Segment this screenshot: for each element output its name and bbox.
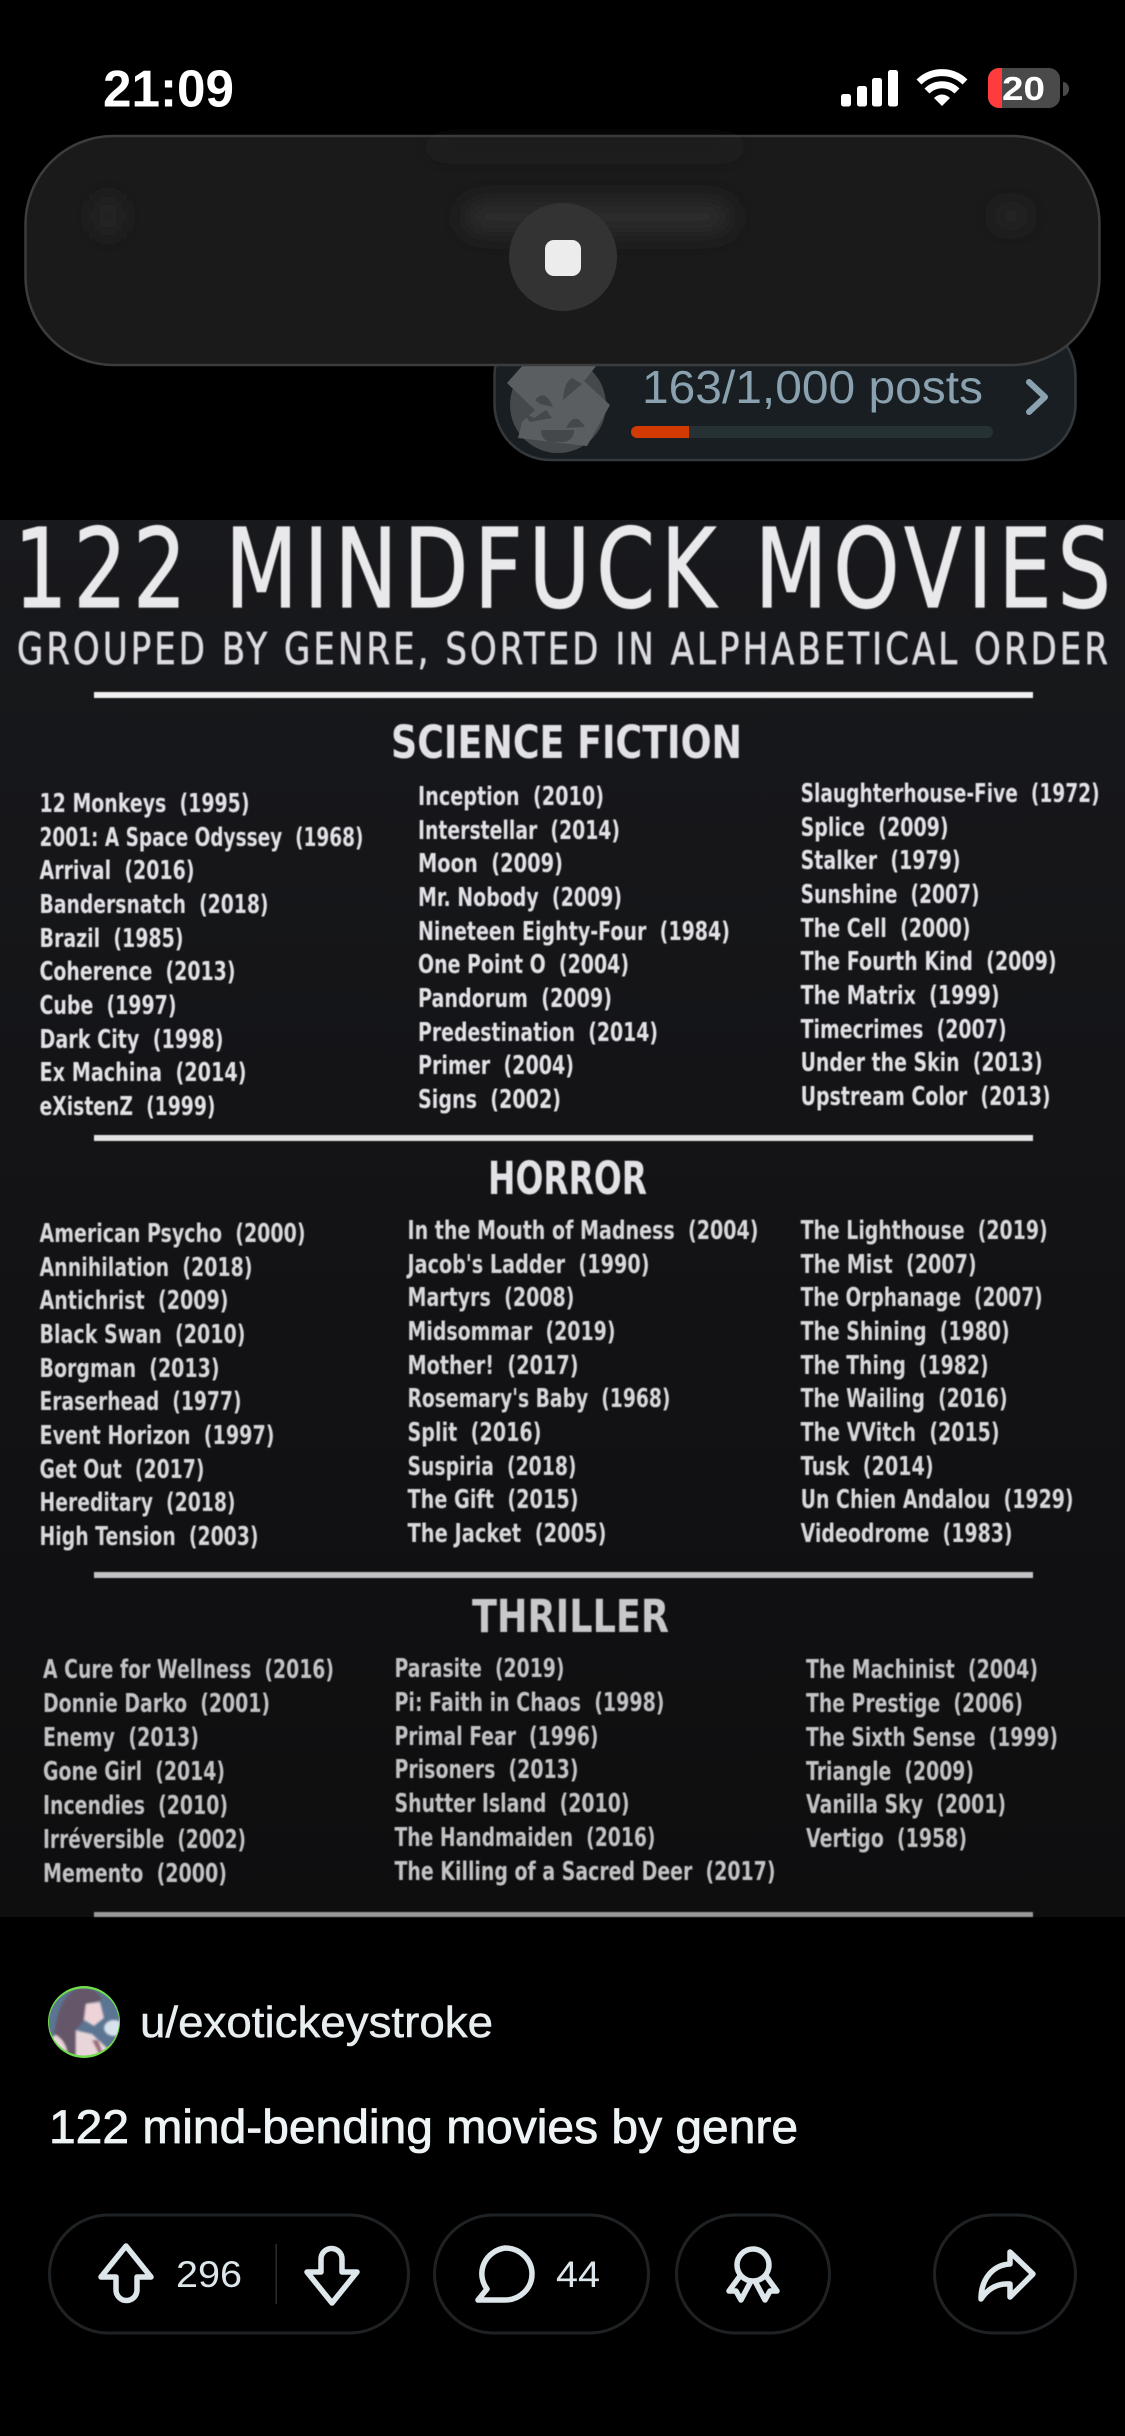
horror column 3: Tusk (2014) <box>801 1452 934 1482</box>
science fiction column 1: Bandersnatch (2018) <box>40 890 268 920</box>
avatar <box>48 1986 124 2060</box>
science fiction column 2: Signs (2002) <box>418 1085 561 1115</box>
science fiction column 3: Splice (2009) <box>801 813 949 843</box>
horror column 2: Jacob's Ladder (1990) <box>406 1250 650 1280</box>
thriller column 1: Incendies (2010) <box>43 1791 228 1821</box>
icon: comment bubble <box>478 2248 532 2300</box>
heading: science fiction: SCIENCE FICTION <box>391 716 742 769</box>
icon: chevron <box>1029 382 1045 412</box>
thriller column 2: Shutter Island (2010) <box>394 1789 630 1819</box>
icon: downvote arrow <box>307 2248 357 2303</box>
thriller column 1: Memento (2000) <box>43 1859 227 1889</box>
status bar <box>103 60 1069 118</box>
thriller column 3: The Machinist (2004) <box>806 1655 1038 1685</box>
thriller column 2: Pi: Faith in Chaos (1998) <box>394 1688 664 1718</box>
science fiction column 2 <box>418 782 730 1115</box>
horror column 3 <box>801 1216 1074 1549</box>
heading: horror: HORROR <box>488 1152 647 1205</box>
science fiction column 1: Brazil (1985) <box>40 924 184 954</box>
action bar <box>50 2215 1076 2333</box>
science fiction column 2: Nineteen Eighty-Four (1984) <box>418 917 730 947</box>
science fiction column 3 <box>801 779 1100 1112</box>
horror column 2: The Gift (2015) <box>408 1485 578 1515</box>
horror column 1: Event Horizon (1997) <box>40 1421 274 1451</box>
science fiction column 1: Cube (1997) <box>40 991 176 1021</box>
thriller column 3: The Prestige (2006) <box>806 1689 1023 1719</box>
horror column 1: Eraserhead (1977) <box>40 1387 242 1417</box>
science fiction column 1: 12 Monkeys (1995) <box>40 789 249 819</box>
science fiction column 3: The Matrix (1999) <box>801 981 1000 1011</box>
icon: upvote arrow <box>101 2246 151 2300</box>
icon: award ribbon <box>729 2249 777 2300</box>
horror column 1: High Tension (2003) <box>40 1522 258 1552</box>
horror column 2: Split (2016) <box>408 1418 542 1448</box>
progress bar <box>631 426 993 438</box>
horror column 3: The Thing (1982) <box>801 1351 989 1381</box>
comment count: 44 <box>556 2254 600 2295</box>
share pill <box>934 2215 1076 2333</box>
section: science fiction <box>40 716 1100 1122</box>
horror column 1 <box>40 1219 306 1552</box>
science fiction column 3: Timecrimes (2007) <box>801 1015 1007 1045</box>
thriller column 2 <box>394 1654 776 1887</box>
horror column 2: Suspiria (2018) <box>408 1452 576 1482</box>
icon: battery <box>988 68 1069 108</box>
post title: 122 mind-bending movies by genre <box>49 2100 798 2153</box>
vote pill <box>50 2215 408 2333</box>
science fiction column 1: Arrival (2016) <box>40 856 194 886</box>
clock: 21:09 <box>103 60 234 118</box>
science fiction column 1: Dark City (1998) <box>40 1025 224 1055</box>
science fiction column 2: Primer (2004) <box>418 1051 574 1081</box>
science fiction column 1: Ex Machina (2014) <box>40 1058 246 1088</box>
blurred floating toolbar <box>26 136 1100 365</box>
section: thriller <box>43 1590 1058 1889</box>
thriller column 1: Gone Girl (2014) <box>43 1757 225 1787</box>
icon: wifi <box>919 73 965 106</box>
science fiction column 2: Interstellar (2014) <box>418 816 620 846</box>
award pill <box>676 2215 830 2333</box>
thriller column 1 <box>43 1655 334 1889</box>
poster image panel <box>0 505 1125 1917</box>
horror column 3: The VVitch (2015) <box>801 1418 1000 1448</box>
horror column 1: Annihilation (2018) <box>40 1253 252 1283</box>
science fiction column 1 <box>40 789 364 1122</box>
icon: cellular signal <box>841 70 898 106</box>
science fiction column 2: Predestination (2014) <box>418 1018 658 1048</box>
thriller column 2: Primal Fear (1996) <box>394 1722 598 1752</box>
horror column 1: Get Out (2017) <box>40 1455 204 1485</box>
horror column 2: Martyrs (2008) <box>408 1283 574 1313</box>
horror column 2: Rosemary's Baby (1968) <box>408 1384 670 1414</box>
thriller column 2: The Handmaiden (2016) <box>394 1823 656 1853</box>
science fiction column 3: The Cell (2000) <box>801 914 971 944</box>
science fiction column 3: Sunshine (2007) <box>801 880 980 910</box>
thriller column 1: Enemy (2013) <box>43 1723 199 1753</box>
thriller column 1: Donnie Darko (2001) <box>43 1689 270 1719</box>
thriller column 1: A Cure for Wellness (2016) <box>43 1655 334 1685</box>
science fiction column 2: One Point O (2004) <box>418 950 629 980</box>
thriller column 2: The Killing of a Sacred Deer (2017) <box>394 1857 776 1887</box>
horror column 2: The Jacket (2005) <box>408 1519 606 1549</box>
icon: grey badge <box>507 357 610 453</box>
horror column 1: Borgman (2013) <box>40 1354 220 1384</box>
thriller column 1: Irréversible (2002) <box>43 1825 246 1855</box>
thriller column 2: Prisoners (2013) <box>394 1755 578 1785</box>
heading: thriller: THRILLER <box>472 1590 669 1643</box>
thriller column 2: Parasite (2019) <box>394 1654 564 1684</box>
horror column 1: Antichrist (2009) <box>40 1286 228 1316</box>
post counter: 163/1,000 posts <box>642 361 983 413</box>
comments pill <box>434 2215 648 2333</box>
horror column 2: In the Mouth of Madness (2004) <box>408 1216 758 1246</box>
thriller column 3 <box>806 1655 1058 1854</box>
science fiction column 1: 2001: A Space Odyssey (1968) <box>40 823 364 853</box>
blurred header content <box>98 144 1027 232</box>
horror column 1: Hereditary (2018) <box>40 1488 236 1518</box>
science fiction column 2: Inception (2010) <box>418 782 604 812</box>
username: u/exotickeystroke <box>140 1998 493 2047</box>
horror column 2: Mother! (2017) <box>408 1351 578 1381</box>
horror column 3: The Mist (2007) <box>801 1250 977 1280</box>
post author <box>48 1986 493 2060</box>
stop button <box>509 203 617 311</box>
icon: battery: 20 <box>1002 70 1045 107</box>
thriller column 3: Vanilla Sky (2001) <box>806 1790 1006 1820</box>
icon: share arrow <box>981 2252 1033 2299</box>
science fiction column 2: Moon (2009) <box>418 849 563 879</box>
science fiction column 1: eXistenZ (1999) <box>40 1092 216 1122</box>
thriller column 3: Triangle (2009) <box>806 1757 974 1787</box>
achievement progress pill <box>494 320 1076 460</box>
science fiction column 3: Under the Skin (2013) <box>801 1048 1043 1078</box>
section: horror <box>40 1152 1074 1552</box>
science fiction column 3: Stalker (1979) <box>801 846 961 876</box>
thriller column 3: Vertigo (1958) <box>806 1824 967 1854</box>
horror column 1: American Psycho (2000) <box>40 1219 306 1249</box>
science fiction column 1: Coherence (2013) <box>40 957 236 987</box>
horror column 3: Videodrome (1983) <box>801 1519 1013 1549</box>
horror column 2: Midsommar (2019) <box>408 1317 616 1347</box>
upvote count: 296 <box>176 2254 242 2295</box>
horror column 3: The Wailing (2016) <box>801 1384 1008 1414</box>
horror column 2 <box>406 1216 758 1549</box>
science fiction column 2: Pandorum (2009) <box>418 984 612 1014</box>
science fiction column 2: Mr. Nobody (2009) <box>418 883 622 913</box>
horror column 3: The Shining (1980) <box>801 1317 1010 1347</box>
horror column 1: Black Swan (2010) <box>40 1320 246 1350</box>
